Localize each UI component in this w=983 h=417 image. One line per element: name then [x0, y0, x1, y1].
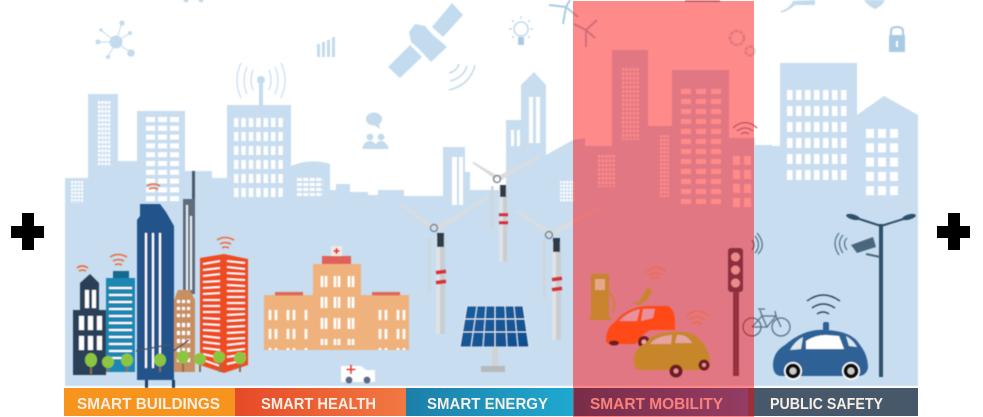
label: smart buildings: SMART BUILDINGS: [77, 396, 220, 413]
street wires: [136, 340, 189, 352]
plug and wifi: [634, 267, 666, 304]
smart health illustration: [264, 246, 409, 384]
icon: small wind turbines: [549, 0, 597, 47]
hospital: [264, 246, 409, 350]
wifi near traffic light: [752, 233, 762, 254]
label: smart energy: [406, 388, 574, 416]
grey tower and tan building: [174, 171, 195, 372]
red-orange building: [200, 254, 248, 373]
label: public safety: PUBLIC SAFETY: [770, 396, 884, 413]
plus sign left: [11, 213, 44, 250]
blue tower: [137, 204, 175, 388]
wind turbine right: [515, 204, 604, 340]
wifi above car: [807, 295, 840, 314]
smart energy illustration: [400, 155, 604, 372]
icon: satellite: [388, 3, 463, 78]
label: smart buildings: [64, 388, 235, 416]
trees: [85, 350, 246, 374]
wifi icons: [77, 184, 234, 271]
smart mobility illustration: [589, 122, 757, 378]
wind turbine left: [400, 196, 489, 334]
overlay: red highlight on smart mobility: [573, 1, 754, 417]
fuel pump: [589, 274, 614, 320]
traffic light: [728, 248, 743, 376]
wifi over building: [733, 122, 757, 134]
tan car: [634, 332, 710, 378]
icon: bar chart: [317, 37, 335, 57]
icon: gears: [730, 31, 754, 56]
label: public safety: [748, 388, 918, 416]
wifi above tan car: [686, 311, 709, 324]
top icons: [96, 0, 905, 149]
label: smart health: [235, 388, 406, 416]
dark house building: [73, 274, 106, 375]
band: category labels: [64, 388, 918, 416]
solar panel: [460, 306, 529, 372]
wind turbine center: [472, 155, 541, 262]
label: smart mobility: [574, 388, 748, 416]
red car: [606, 306, 675, 348]
label: smart mobility: SMART MOBILITY: [590, 396, 724, 413]
smart buildings illustration: [73, 171, 248, 388]
autonomous blue car: [773, 322, 868, 380]
plus sign right: [937, 213, 970, 250]
bicycle: [743, 309, 790, 336]
icon: top edge fragments: [184, 0, 885, 13]
teal building: [106, 271, 135, 372]
street lamp with camera: [835, 213, 916, 377]
background skyline: [65, 50, 918, 386]
icon: antenna signal: [237, 63, 285, 106]
icon: people talking: [362, 112, 389, 149]
icon: signal arcs: [449, 64, 475, 90]
ambulance: [341, 365, 375, 384]
label: smart health: SMART HEALTH: [261, 396, 376, 413]
icon: padlock: [889, 27, 905, 52]
public safety illustration: [743, 213, 916, 380]
icon: light bulb: [509, 16, 533, 45]
icon: network nodes: [96, 20, 135, 59]
label: smart energy: SMART ENERGY: [427, 396, 549, 413]
